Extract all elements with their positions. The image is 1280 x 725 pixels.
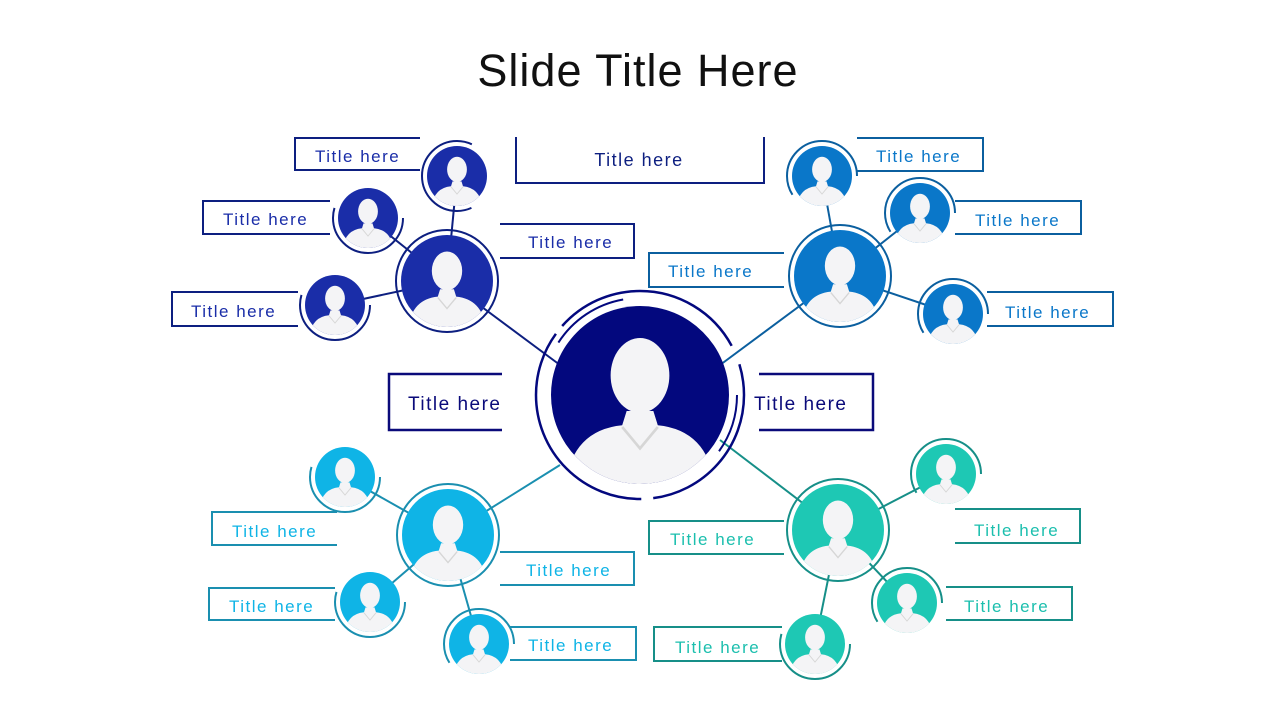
cluster: bottom-right: Title here [974, 521, 1059, 540]
title: Slide Title Here [477, 45, 799, 96]
cluster: top-left: Title here [315, 147, 400, 166]
top box [516, 137, 764, 183]
cluster: bottom-left [209, 442, 636, 679]
cluster: bottom-right [649, 439, 1080, 679]
cluster: bottom-left: Title here [229, 597, 314, 616]
cluster: top-right: Title here [975, 211, 1060, 230]
cluster: top-right: Title here [1005, 303, 1090, 322]
cluster: top-right: Title here [668, 262, 753, 281]
cluster: bottom-right: Title here [670, 530, 755, 549]
cluster: top-left: Title here [528, 233, 613, 252]
cluster: top-left: Title here [191, 302, 276, 321]
top box: Title here [594, 150, 684, 170]
cluster: bottom-left: Title here [526, 561, 611, 580]
cluster: bottom-left: Title here [528, 636, 613, 655]
left center box: Title here [408, 394, 502, 415]
connector lines [335, 176, 953, 644]
left center box [389, 374, 502, 430]
right center box [754, 374, 873, 430]
cluster: top-right [649, 138, 1113, 349]
center avatar [536, 291, 744, 499]
cluster: bottom-left: Title here [232, 522, 317, 541]
cluster: top-right: Title here [876, 147, 961, 166]
cluster: bottom-right: Title here [964, 597, 1049, 616]
cluster: bottom-right: Title here [675, 638, 760, 657]
cluster: top-left: Title here [223, 210, 308, 229]
cluster: top-left [172, 138, 634, 340]
right center box: Title here [754, 394, 848, 415]
